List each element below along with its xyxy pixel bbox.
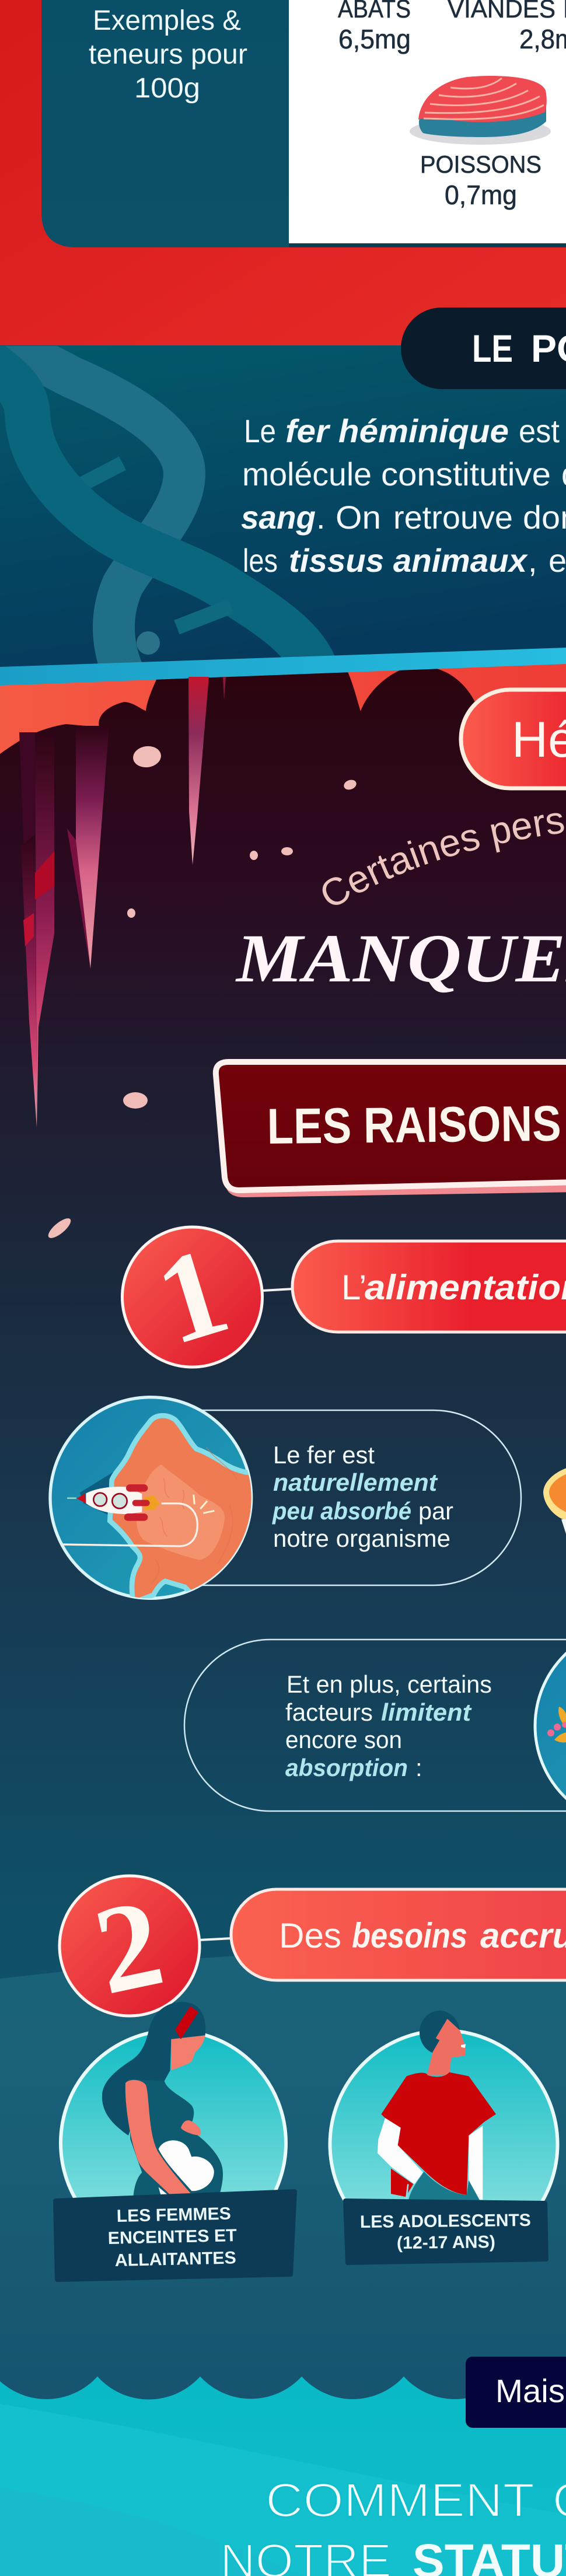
- text: naturally poorly absorbed: peu absorbé: [272, 1497, 411, 1525]
- callout: mais: [466, 2357, 566, 2428]
- text block: heme iron definition: [241, 413, 566, 579]
- item: viandes: [448, 0, 566, 54]
- panel: pregnant women: [55, 2002, 295, 2280]
- text: factors limit absorption: encore son: [285, 1726, 402, 1753]
- item: poissons: POISSONS: [420, 151, 541, 178]
- circle background: [330, 2030, 558, 2258]
- pill: des besoins accrus: Des: [279, 1916, 341, 1955]
- section: turquoise bottom with scalloped edge: [0, 2376, 566, 2576]
- stalactites: [19, 677, 226, 1127]
- caption box: [55, 2191, 295, 2280]
- item: abats: 6,5mg: [338, 24, 411, 54]
- red background section: [0, 0, 566, 350]
- panel: heme iron section: [0, 307, 566, 677]
- text: naturally poorly absorbed: notre organisme: [273, 1525, 450, 1552]
- text block: heme iron definition: .: [316, 499, 326, 536]
- item: abats: [338, 0, 411, 54]
- text: factors limit absorption: Et en plus, certains: [287, 1670, 492, 1698]
- banner: les raisons: [216, 1062, 566, 1197]
- pill: l'alimentation: [292, 1241, 566, 1332]
- text: examples and content per 100g: Exemples &: [93, 5, 241, 36]
- heading pill: le point: LE: [472, 327, 513, 370]
- caption text: ENCEINTES ET: [107, 2226, 237, 2248]
- icon: orange fruit: [543, 1466, 566, 1536]
- text block: heme iron definition: molécule: [242, 456, 372, 492]
- icon: fish steak: [410, 76, 551, 145]
- text block: heme iron definition: les: [243, 542, 278, 579]
- background: dark cave and body gradient: [0, 666, 566, 2399]
- text block: heme iron definition: ,: [528, 542, 537, 579]
- background: lighter hill: [0, 1955, 566, 2399]
- text: naturally poorly absorbed: naturellement: [273, 1469, 438, 1496]
- pill: l'alimentation: alimentation: [365, 1268, 566, 1307]
- text: examples and content per 100g: teneurs pour: [89, 39, 247, 70]
- illustration: pregnant woman: [102, 2002, 223, 2198]
- caption text: [107, 2204, 237, 2270]
- item: poissons: 0,7mg: [445, 180, 517, 210]
- icon: rocket in intestine: [48, 1396, 253, 1600]
- heading pill: le point: [401, 307, 566, 389]
- icon: DNA helix: [0, 344, 318, 677]
- illustration: adolescent: [378, 2011, 496, 2201]
- reason 2 connector: [199, 1938, 232, 1940]
- reason 1 connector: [263, 1289, 293, 1291]
- text block: heme iron definition: tissus animaux: [289, 542, 529, 579]
- pill: des besoins accrus: besoins: [352, 1916, 467, 1955]
- text: naturally poorly absorbed: par: [418, 1497, 453, 1525]
- text block: heme iron definition: est: [519, 413, 560, 449]
- icon: blue circle with flowers: [535, 1626, 566, 1826]
- text: factors limit absorption: :: [415, 1754, 422, 1781]
- text block: heme iron definition: fer héminique: [285, 413, 509, 449]
- text: naturally poorly absorbed: Le fer est: [273, 1441, 375, 1469]
- panel bottom edge: [289, 243, 566, 247]
- pill: heminique: [461, 690, 566, 788]
- red band under the stripe: [0, 656, 566, 794]
- text block: heme iron definition: Le: [244, 413, 276, 449]
- text: naturally poorly absorbed: [272, 1441, 453, 1552]
- text: examples and content per 100g: 100g: [134, 73, 200, 104]
- panel: iron naturally poorly absorbed: [48, 1397, 566, 1612]
- pill outline: [198, 1410, 521, 1585]
- caption text: LES FEMMES: [116, 2204, 231, 2226]
- badge: number 2: [60, 1872, 200, 2021]
- text block: heme iron definition: On: [336, 499, 381, 536]
- badge: number 1: 1: [142, 1219, 242, 1371]
- panel left column: [41, 0, 292, 247]
- text: examples and content per 100g: [89, 5, 247, 104]
- text block: heme iron definition: sang: [241, 499, 316, 536]
- caption text: (12-17 ANS): [397, 2232, 495, 2253]
- circle background: [61, 2030, 286, 2256]
- text: factors limit absorption: limitent: [381, 1698, 472, 1726]
- text: factors limit absorption: absorption: [285, 1754, 408, 1781]
- panel: factors limiting absorption: [184, 1626, 566, 1826]
- caption box: [345, 2201, 546, 2263]
- text block: heme iron definition: constitutive: [381, 456, 551, 492]
- panel: adolescents: [330, 2011, 558, 2263]
- pill outline: [184, 1640, 566, 1811]
- pill: l'alimentation: L’: [341, 1268, 366, 1307]
- item: poissons: [420, 151, 541, 210]
- caption text: ALLAITANTES: [114, 2248, 236, 2270]
- caption text: LES ADOLESCENTS: [360, 2211, 531, 2232]
- text block: heme iron definition: retrouve: [393, 499, 513, 536]
- panel white column: [289, 0, 566, 243]
- callout: mais: Mais: [495, 2372, 565, 2409]
- pill: des besoins accrus: [231, 1889, 566, 1980]
- caption text: [360, 2211, 531, 2253]
- drops: [46, 745, 358, 1241]
- heading: comment connaitre notre statut: COMMENT: [265, 2474, 534, 2527]
- text: factors limit absorption: [285, 1670, 492, 1781]
- badge: number 2: 2: [83, 1872, 174, 2021]
- diagonal blue stripe: [0, 648, 566, 686]
- panel: iron sources table: [41, 0, 566, 247]
- text: factors limit absorption: facteurs: [285, 1698, 373, 1726]
- heading: comment connaitre notre statut: [220, 2474, 566, 2576]
- teal background: [0, 345, 566, 672]
